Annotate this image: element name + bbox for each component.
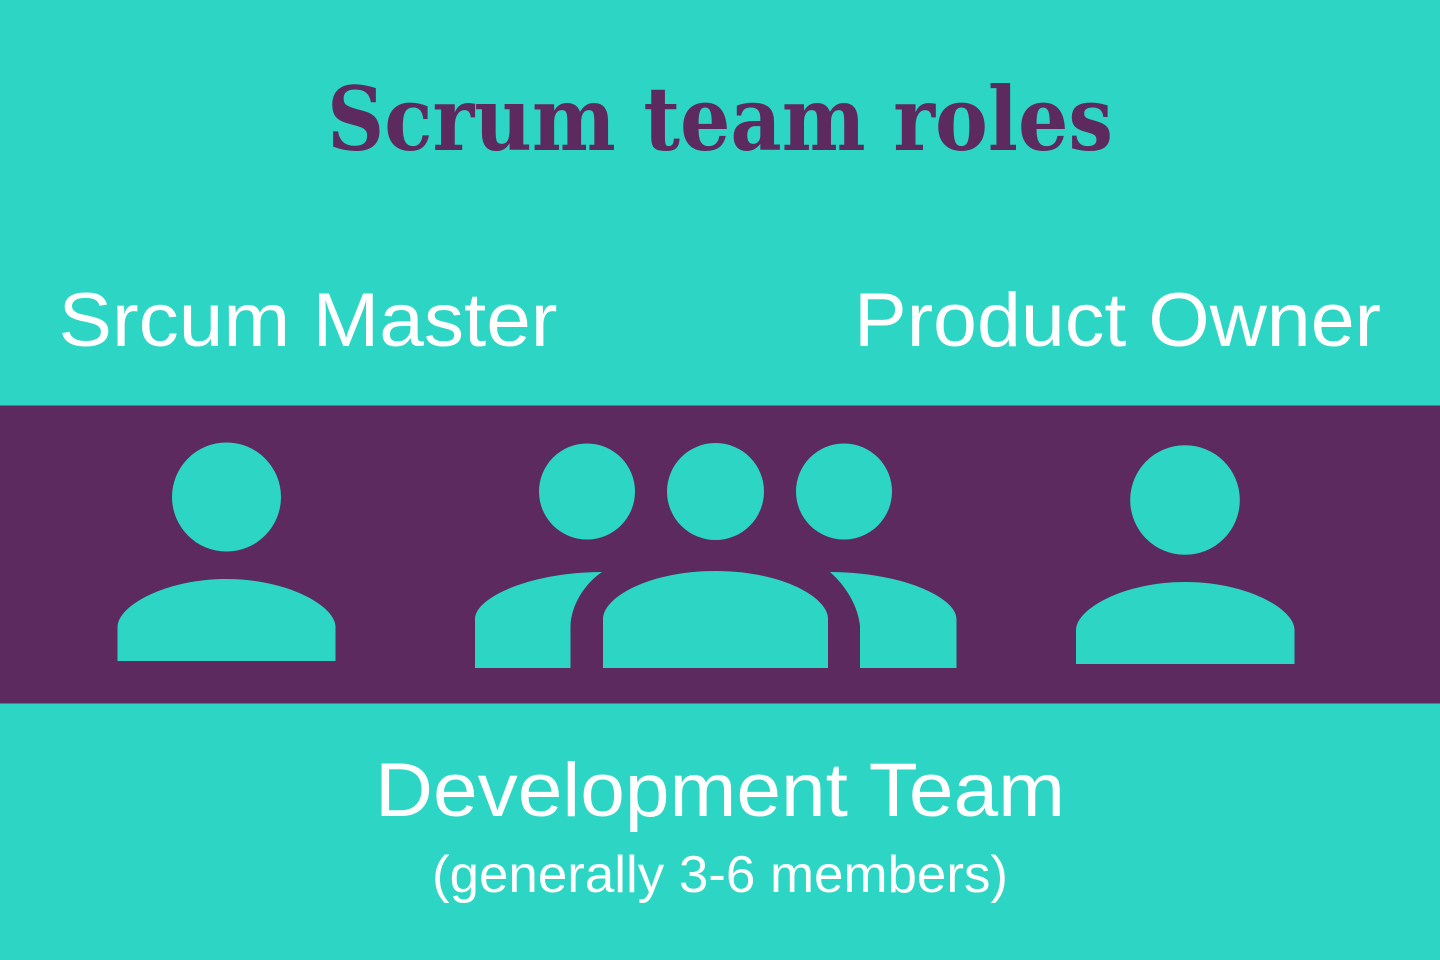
icon: development team group bbox=[475, 443, 956, 668]
icon: scrum master person bbox=[118, 442, 336, 661]
label: Product Owner: Product Owner bbox=[854, 278, 1381, 363]
title: Scrum team roles bbox=[327, 67, 1113, 171]
label: Scrum Master: Srcum Master bbox=[58, 278, 558, 363]
icon: product owner person bbox=[1076, 445, 1294, 664]
label: Development Team: Development Team bbox=[375, 748, 1065, 833]
note: team size: (generally 3-6 members) bbox=[432, 846, 1008, 904]
band: icon strip bbox=[0, 406, 1440, 704]
